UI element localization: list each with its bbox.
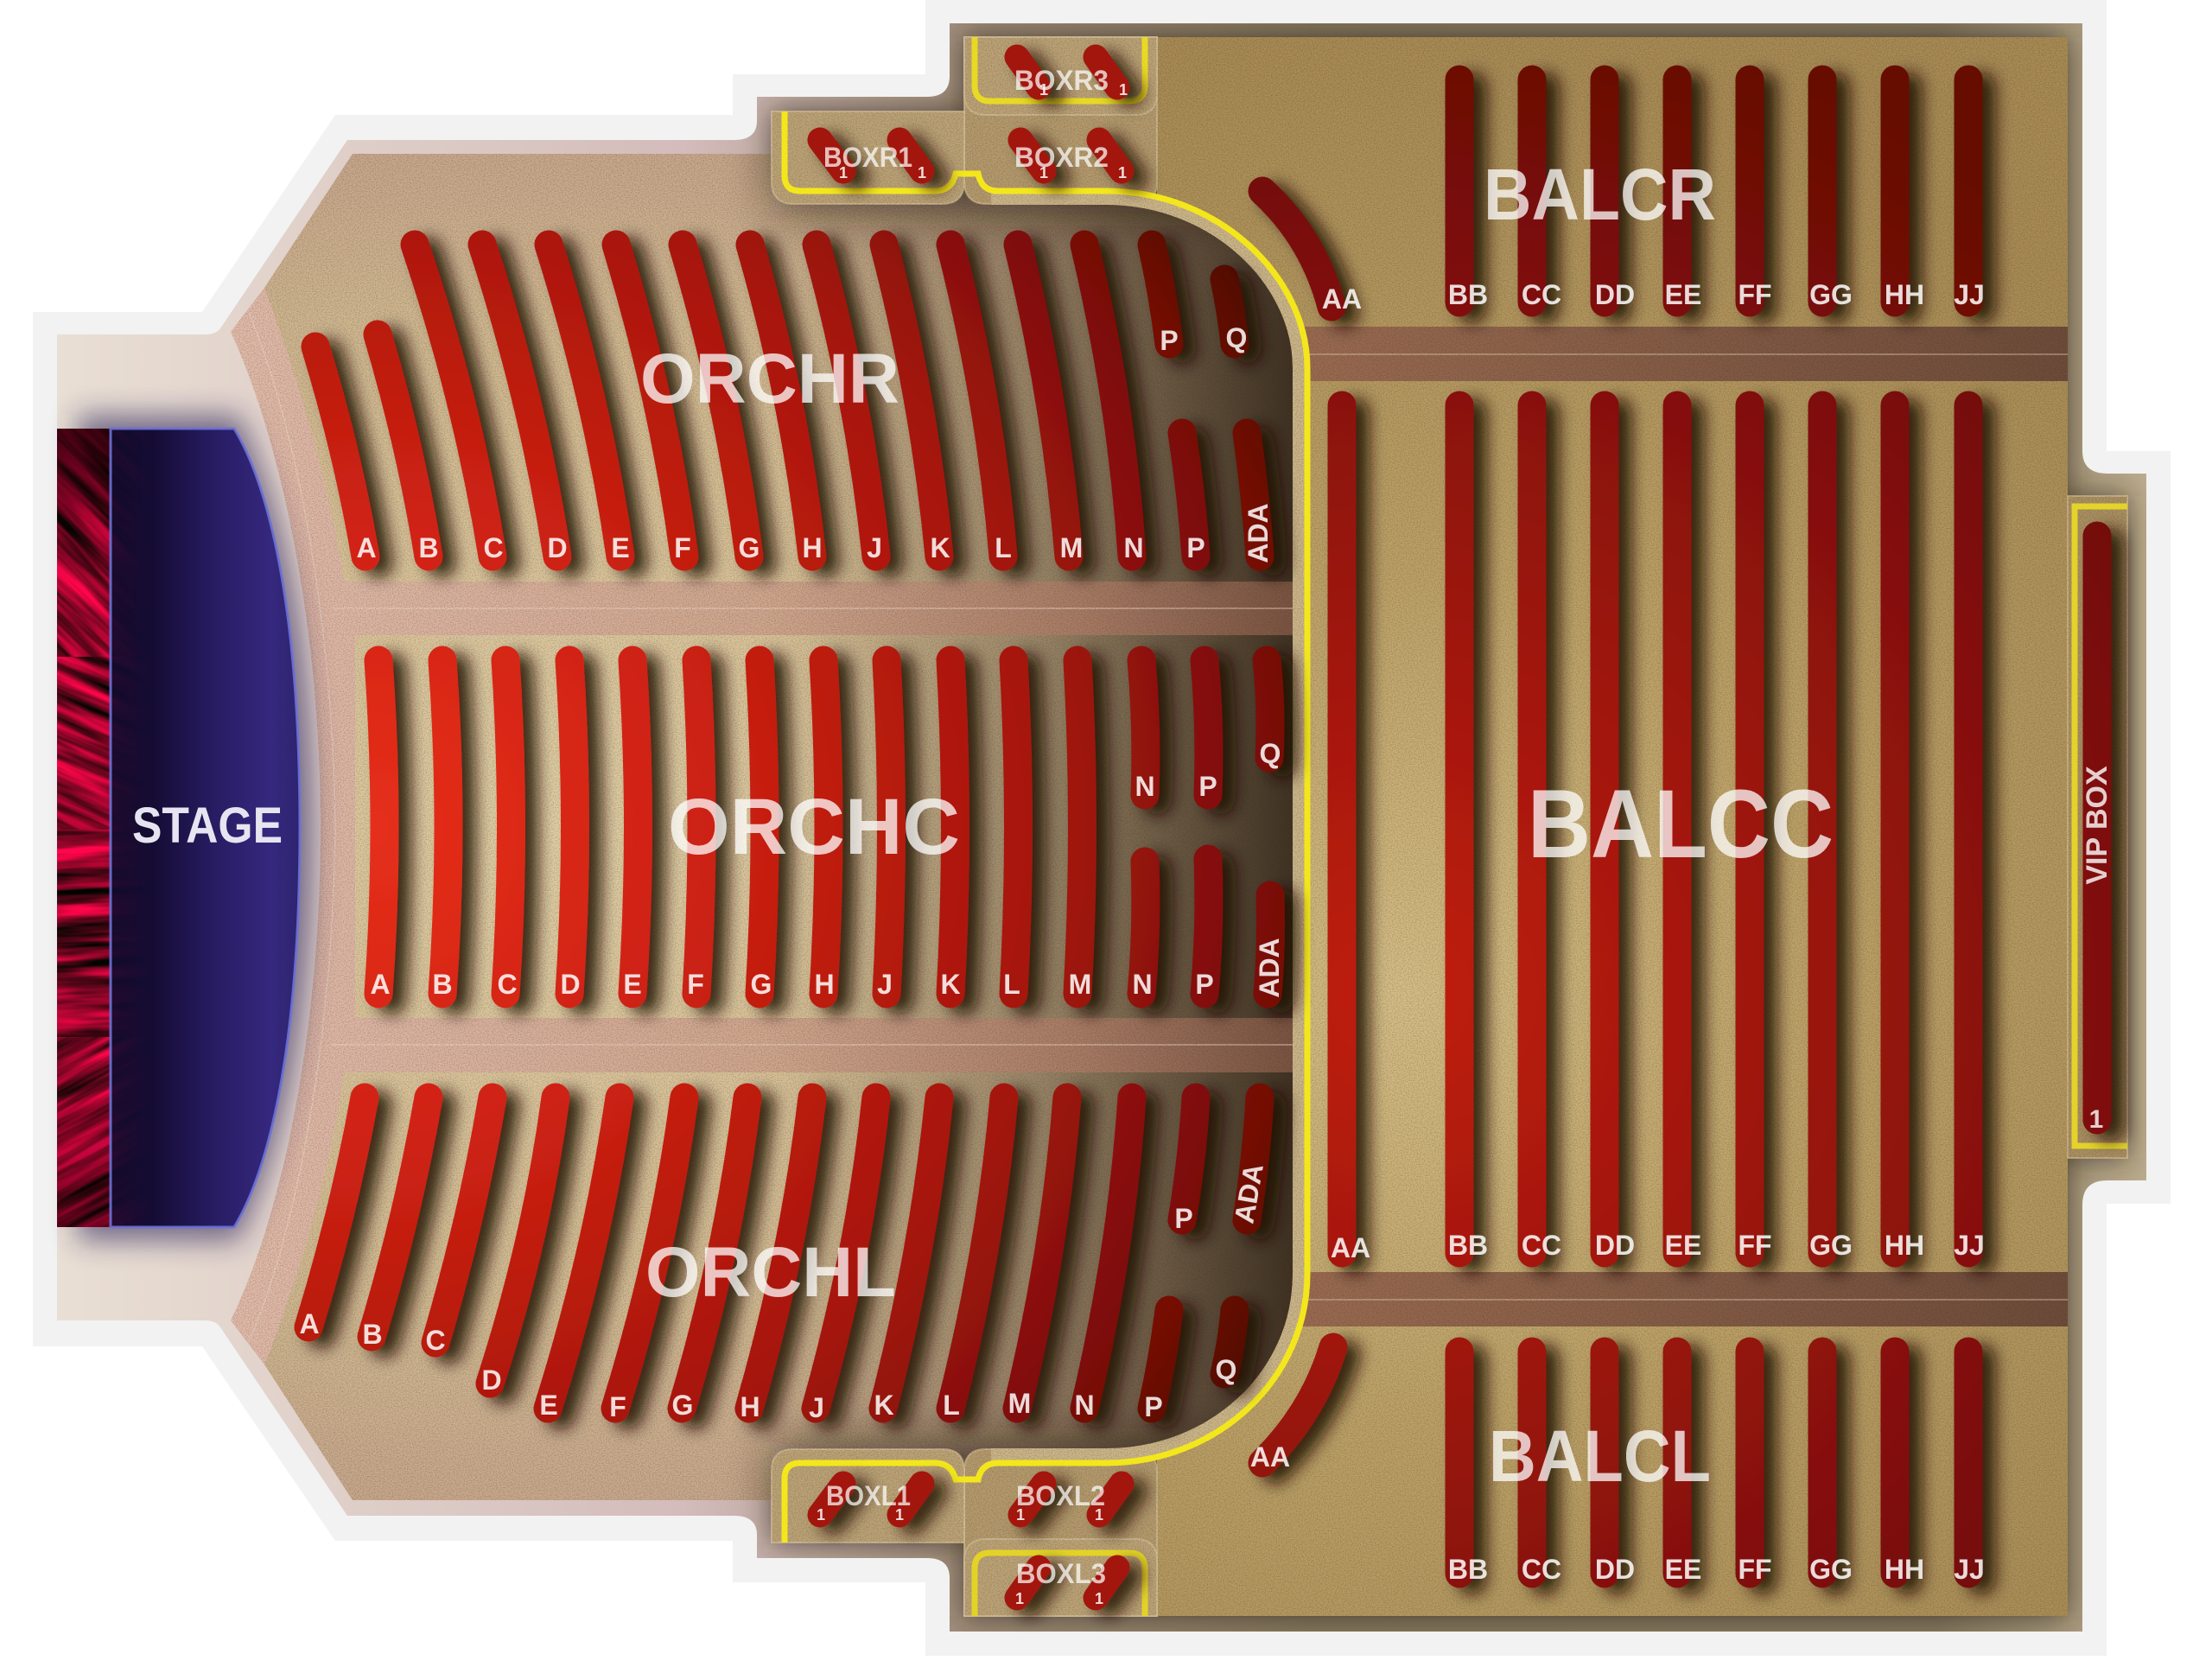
row labels orchestra right: C [483, 532, 504, 563]
box seat numbers: 1 [1119, 81, 1128, 99]
row labels balcony: HH [1885, 279, 1924, 310]
row labels orchestra center: F [687, 969, 704, 1000]
row labels orchestra left: K [874, 1390, 894, 1421]
row labels balcony: JJ [1954, 1230, 1985, 1261]
box seat numbers: 1 [1095, 1506, 1103, 1524]
row labels orchestra center: Q [1260, 738, 1281, 769]
row labels orchestra right: F [674, 532, 691, 563]
box tiles [772, 37, 1157, 1616]
row labels balcony: AA [1331, 1232, 1370, 1263]
row labels orchestra right: D [547, 532, 568, 563]
VIP box tile [2068, 496, 2127, 1158]
box seat numbers: 1 [1016, 1506, 1025, 1524]
row labels orchestra center: L [1003, 969, 1020, 1000]
row labels balcony: CC [1522, 1554, 1561, 1585]
box labels [823, 65, 1109, 1589]
box seat numbers: 1 [1039, 164, 1048, 181]
box seat numbers: 1 [1015, 1590, 1024, 1607]
row labels orchestra right: B [418, 532, 439, 563]
row labels balcony: FF [1738, 279, 1772, 310]
row labels balcony: BB [1448, 1554, 1488, 1585]
row labels balcony: BB [1448, 1230, 1488, 1261]
yellow barrier box L3 [975, 1553, 1145, 1616]
row labels orchestra right: L [995, 532, 1012, 563]
row labels orchestra left: P [1144, 1391, 1163, 1422]
row labels orchestra right [356, 322, 1274, 563]
balcony floor [1106, 37, 2068, 1616]
row labels orchestra center: C [497, 969, 518, 1000]
yellow barrier VIP [2075, 506, 2127, 1146]
row labels balcony: AA [1250, 1441, 1290, 1473]
box labels: BOXR2 [1014, 142, 1109, 173]
row labels orchestra center: E [623, 969, 642, 1000]
row labels balcony: CC [1522, 1230, 1561, 1261]
row labels balcony [1250, 279, 1985, 1585]
row labels orchestra center: P [1195, 969, 1214, 1000]
row labels orchestra right: H [802, 532, 823, 563]
box labels: BOXL3 [1016, 1558, 1106, 1589]
box seat numbers: 1 [817, 1506, 825, 1524]
balcony rows [1262, 80, 2097, 1574]
curtain [57, 429, 128, 1227]
row labels balcony: GG [1809, 1230, 1853, 1261]
row labels orchestra left: N [1074, 1390, 1095, 1421]
row labels orchestra left: F [609, 1391, 626, 1422]
box labels: BOXR3 [1014, 65, 1109, 96]
stage glow [78, 415, 313, 1241]
box labels: BOXL2 [1016, 1480, 1105, 1511]
row labels orchestra right: G [739, 532, 760, 563]
box seat numbers [817, 81, 1128, 1607]
row labels orchestra center: J [877, 969, 893, 1000]
row labels orchestra center: A [370, 969, 391, 1000]
orchestra center rows [378, 660, 1271, 994]
row labels orchestra center: N [1135, 771, 1155, 802]
row labels orchestra right: P [1186, 532, 1205, 563]
box seat numbers: 1 [895, 1506, 904, 1524]
row labels orchestra center: ADA [1254, 938, 1285, 998]
yellow barrier box R3 [975, 37, 1145, 101]
orchestra right rows [315, 245, 1260, 557]
box shadow on orchestra floor [740, 154, 1208, 1500]
row labels orchestra left: L [943, 1390, 960, 1421]
label: ORCHR: ORCHR [640, 340, 899, 418]
row labels orchestra right: N [1123, 532, 1144, 563]
row labels orchestra left: J [809, 1392, 824, 1423]
row labels orchestra center: G [751, 969, 772, 1000]
orchestra floor [231, 154, 1293, 1500]
row labels orchestra left: M [1008, 1388, 1031, 1419]
row labels balcony: CC [1522, 279, 1561, 310]
row labels orchestra center: N [1132, 969, 1153, 1000]
row labels orchestra center: D [560, 969, 581, 1000]
label: BALCL: BALCL [1489, 1415, 1711, 1497]
row labels orchestra center: H [814, 969, 835, 1000]
row labels balcony: HH [1885, 1554, 1924, 1585]
VIP box labels [2081, 766, 2113, 1134]
VIP box labels: 1 [2089, 1105, 2103, 1134]
box rows [820, 57, 1122, 1598]
row labels orchestra left: D [481, 1364, 502, 1396]
label: STAGE: STAGE [132, 798, 283, 854]
row labels balcony: FF [1738, 1554, 1772, 1585]
label: ORCHL: ORCHL [645, 1233, 896, 1312]
row labels orchestra right: A [356, 532, 377, 563]
label: BALCR: BALCR [1484, 154, 1716, 235]
row labels orchestra right: P [1160, 325, 1179, 356]
row labels orchestra right: ADA [1243, 503, 1274, 563]
box seat numbers: 1 [918, 164, 926, 181]
row labels balcony: EE [1665, 1230, 1701, 1261]
row labels orchestra right: E [611, 532, 630, 563]
VIP box labels: VIP BOX [2081, 766, 2113, 885]
row labels balcony: DD [1595, 1554, 1635, 1585]
row labels balcony: JJ [1954, 1554, 1985, 1585]
box labels: BOXL1 [826, 1480, 911, 1511]
cross aisles orchestra [231, 288, 1293, 1364]
label: ORCHC: ORCHC [668, 783, 960, 871]
box seat numbers: 1 [1095, 1590, 1103, 1607]
row labels orchestra left: P [1174, 1203, 1193, 1234]
box labels: BOXR1 [823, 142, 912, 173]
orchestra left rows [308, 1097, 1260, 1409]
row labels balcony: BB [1448, 279, 1488, 310]
box seat numbers: 1 [1118, 164, 1127, 181]
row labels balcony: DD [1595, 1230, 1635, 1261]
yellow barrier main [785, 111, 1307, 1543]
row labels orchestra left: E [539, 1390, 558, 1421]
row labels orchestra center [370, 738, 1285, 1000]
row labels balcony: GG [1809, 1554, 1853, 1585]
wall shadow around balcony [772, 37, 2127, 1616]
row labels orchestra center: K [940, 969, 961, 1000]
row labels balcony: JJ [1954, 279, 1985, 310]
box seat numbers: 1 [839, 164, 848, 181]
row labels orchestra left [299, 1161, 1269, 1423]
row labels orchestra left: H [740, 1391, 760, 1422]
row labels orchestra right: K [930, 532, 950, 563]
row labels orchestra center: M [1069, 969, 1091, 1000]
row labels orchestra left: Q [1216, 1354, 1236, 1385]
row labels balcony: FF [1738, 1230, 1772, 1261]
row labels orchestra right: J [867, 532, 882, 563]
box seat numbers: 1 [1039, 81, 1048, 99]
row labels balcony: EE [1665, 279, 1701, 310]
row labels balcony: EE [1665, 1554, 1701, 1585]
row labels orchestra center: P [1198, 771, 1217, 802]
row labels orchestra left: A [299, 1308, 320, 1339]
stage [111, 429, 300, 1227]
cross aisles balcony [1293, 327, 2068, 1326]
row labels orchestra right: M [1060, 532, 1083, 563]
label: BALCC: BALCC [1528, 770, 1834, 878]
row labels orchestra left: ADA [1228, 1161, 1269, 1225]
row labels orchestra right: Q [1226, 322, 1247, 353]
row labels balcony: AA [1322, 283, 1362, 315]
curved wall strip [991, 197, 1300, 1456]
section labels [640, 154, 1834, 1497]
row labels orchestra center: B [432, 969, 453, 1000]
row labels orchestra left: B [362, 1319, 383, 1350]
row labels balcony: GG [1809, 279, 1853, 310]
row labels balcony: HH [1885, 1230, 1924, 1261]
row labels balcony: DD [1595, 279, 1635, 310]
row labels orchestra left: C [425, 1325, 446, 1356]
row labels orchestra left: G [672, 1390, 693, 1421]
